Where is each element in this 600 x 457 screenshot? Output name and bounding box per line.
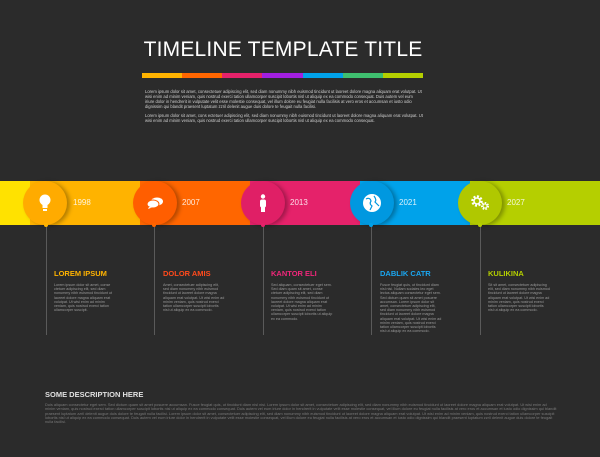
intro text xyxy=(145,89,423,123)
icon: gears xyxy=(458,181,502,225)
milestone 2021 xyxy=(350,181,417,225)
panel: lorem ipsum xyxy=(54,269,112,312)
panel: dolor amis: Amet, consectetuer adipiscing elit, sed diam nonummy nibh euismod tincidunt ut laoreet dolore magna aliquam erat volutpat. Ut wisi enim ad minim veniam, quis nostrud exerci tation ullamcorper suscipit lobortis nisl ut aliquip ex ea commodo. xyxy=(163,283,224,312)
panel: kantor eli: Sed aliquam, consectetuer eget sem. Sed diam quam sit amet, conse ctetuer adipiscing elit, sed diam nonummy nibh euismod tincidunt ut laoreet dolore magna aliquam erat volutpat. Ut wisi enim ad minim veniam, quis nostrud exerci tation ullamcorper suscipit lobortis ut aliquip ex ea commodo. xyxy=(271,283,332,321)
milestone 2021: 2021 xyxy=(399,198,417,207)
milestone 2013 xyxy=(241,181,308,225)
milestone 1998: 1998 xyxy=(73,198,91,207)
title: TIMELINE TEMPLATE TITLE xyxy=(144,38,422,61)
milestone 2007: 2007 xyxy=(182,198,200,207)
milestone 2027 xyxy=(458,181,525,225)
icon: person xyxy=(241,181,285,225)
panel: kulikina: KULIKINA xyxy=(488,269,524,278)
panel: lorem ipsum: LOREM IPSUM xyxy=(54,269,107,278)
milestone 2007 xyxy=(133,181,200,225)
icon: speech bubbles xyxy=(133,181,177,225)
panel: dolor amis xyxy=(163,269,224,312)
milestone 2027: 2027 xyxy=(507,198,525,207)
panel: kantor eli: KANTOR ELI xyxy=(271,269,317,278)
panel: lorem ipsum: Lorem ipsum dolor sit amet, conse ctetuer adipiscing elit, sed diam nonummy nibh euismod tincidunt ut laoreet dolore magna aliquam erat volutpat. Ut wisi enim ad minim veniam, quis nostrud exerci tation ullamcorper suscipit. xyxy=(54,283,112,312)
description text: Duis aliquam consectetur eget sem. Sed dictum quam sit amet posuere accumsan. Fusce feugiat quis, ut tincidunt diam nisl nisi. Lorem ipsum dolor sit amet, consectetuer adipiscing elit, sed diam nonummy nibh euismod tincidunt ut laoreet dolore magna aliquam erat volutpat. Ut wisi enim ad minim veniam, quis nostrud exerci tation ullamcorper suscipit lobortis nisl ut aliquip ex ea commodo consequat. Duis autem vel eum iriure dolor in hendrerit in vulputate velit esse molestie consequat, vel illum dolore eu feugiat nulla facilisis at vero eros et accumsan et iusto odio dignissim qui blandit praesent luptatum zzril delenit augue duis dolore te feugait nulla facilisi. Lorem ipsum dolor sit amet, consectetuer adipiscing elit, sed diam nonummy nibh euismod tincidunt ut laoreet dolore magna aliquam erat volutpat. Ut wisi enim ad minim veniam, quis nostrud exerci tation ullamcorper suscipit lobortis nisl ut aliquip ex ea commodo consequat. Duis autem vel eum iriure dolor in hendrerit in vulputate velit esse molestie consequat, vel illum dolore eu feugiat nulla facilisis at vero eros et accumsan et iusto odio dignissim qui blandit praesent luptatum zzril delenit augue duis dolore te feugait nulla facilisi. xyxy=(45,402,556,424)
icon: globe xyxy=(350,181,394,225)
panel: kulikina xyxy=(488,269,550,312)
description heading: SOME DESCRIPTION HERE xyxy=(45,390,143,399)
connector lines xyxy=(44,223,482,335)
milestone 2013: 2013 xyxy=(290,198,308,207)
milestone 1998 xyxy=(23,181,91,225)
color bar xyxy=(142,73,423,78)
panel: dablik catr: Fusce feugiat quis, ut tincidunt diam nisl nisi. Nullam sodales leo eget lectus aliquam consectetur eget sem. Sed dictum quam sit amet posuere accumsan. Lorem ipsum dolor sit amet, consectetuer adipiscing elit, sed diam nonummy nibh euismod tincidunt ut laoreet dolore magna aliquam erat volutpat. Ut wisi enim ad minim veniam, quis nostrud exerci tation ullamcorper suscipit lobortis nisl ut aliquip ex ea commodo. xyxy=(380,283,441,333)
panel: dolor amis: DOLOR AMIS xyxy=(163,269,211,278)
intro text: Lorem ipsum dolor sit amet, consectetuer adipiscing elit, sed diam nonummy nibh euismod tincidunt ut laoreet dolore magna aliquam erat volutpat. Ut wisi enim ad minim veniam, quis nostrud exerci tation ullamcorper suscipit lobortis nisl ut aliquip ex ea commodo consequat. Duis autem vel eum iriure dolor in hendrerit in vulputate velit esse molestie consequat, vel illum dolore eu feugiat nulla facilisis at vero eros et accumsan et iusto odio dignissim qui blandit praesent luptatum zzril delenit augue duis dolore te feugait nulla facilisi. xyxy=(145,89,422,109)
panel: dablik catr: DABLIK CATR xyxy=(380,269,431,278)
panel: kulikina: Sit sit amet, consectetuer adipiscing elit, sed diam nonummy nibh euismod tincidunt ut laoreet dolore magna aliquam erat volutpat. Ut wisi enim ad minim veniam, quis nostrud exerci tation ullamcorper suscipit lobortis nisl ut aliquip ex ea commodo. xyxy=(488,283,550,312)
intro text: Lorem ipsum dolor sit amet, cons ectetuer adipiscing elit, sed diam nonummy nibh euismod tincidunt ut laoreet dolore magna aliquam erat volutpat. Ut wisi enim ad minim veniam, quis nostrud exerci tation ullamcorper suscipit lobortis nisl ut aliquip ex ea commodo consequat. xyxy=(145,113,423,123)
icon: light bulb xyxy=(23,181,67,225)
